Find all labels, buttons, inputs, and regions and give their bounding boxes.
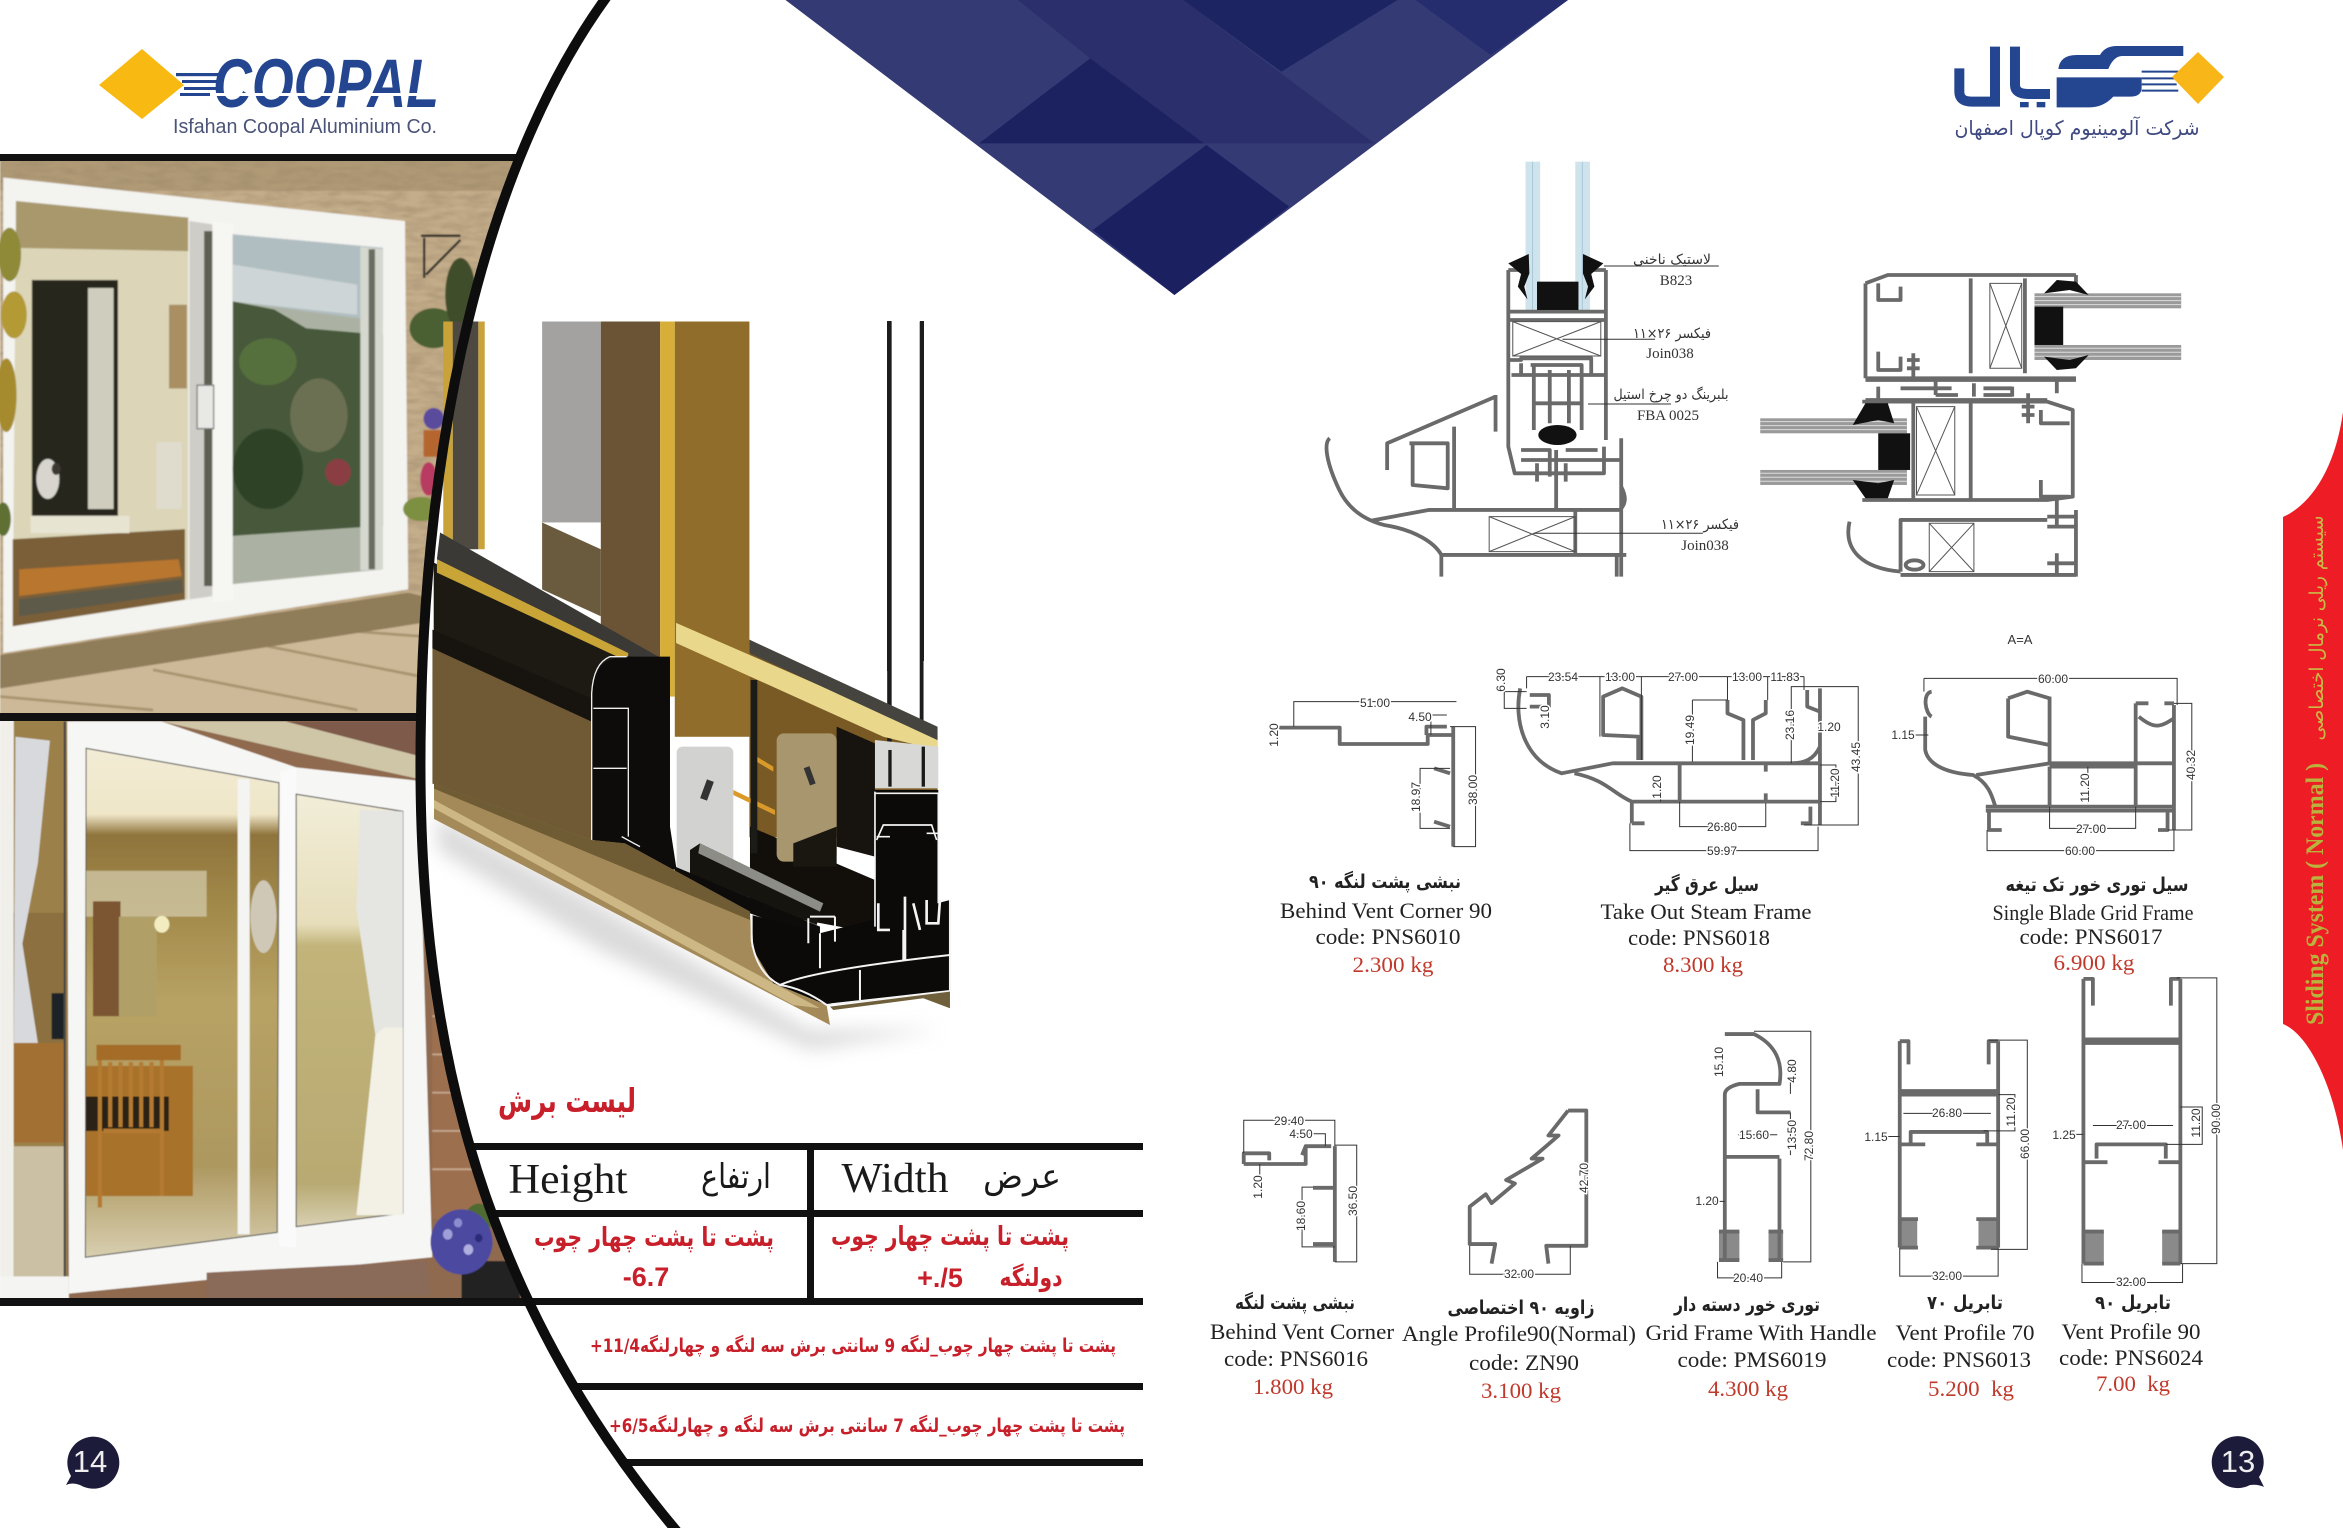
plants	[0, 228, 476, 536]
dimensions: 1.20	[1817, 720, 1841, 734]
company name: Isfahan Coopal Aluminium Co.	[173, 116, 437, 138]
dimensions: 59.97	[1707, 844, 1737, 858]
dimensions: 29.40	[1274, 1114, 1304, 1128]
dimensions	[1267, 696, 1480, 812]
dimensions: 27.00	[2076, 822, 2106, 836]
dimensions: 72.80	[1802, 1131, 1816, 1161]
header: height	[508, 1157, 771, 1203]
dimensions: 66.00	[2018, 1129, 2032, 1159]
dimensions: 18.97	[1409, 782, 1423, 812]
wordmark shapes	[1959, 46, 2183, 107]
dimensions: 51.00	[1360, 696, 1390, 710]
dimensions	[1504, 1163, 1591, 1281]
dimensions: 1.15	[1891, 728, 1915, 742]
callouts: FBA 0025	[1637, 408, 1699, 424]
cell: height formula: -6.7	[623, 1262, 669, 1292]
english tab title: Sliding System ( Normal )	[2302, 763, 2329, 1025]
persian name: تابریل ۷۰	[1927, 1292, 2003, 1314]
page number 13: 13	[2221, 1444, 2255, 1479]
dimensions: 1.20	[1695, 1194, 1719, 1208]
leader lines	[1534, 266, 1719, 533]
panel: cut list table	[470, 1081, 1143, 1466]
dimensions: 13.00	[1732, 670, 1762, 684]
panel: photographs clipped by curve	[0, 157, 541, 1303]
dimensions: 11.20	[2078, 773, 2092, 803]
dimensions: 26.80	[1932, 1106, 1962, 1120]
code: code: PNS6013	[1887, 1347, 2031, 1372]
dimensions: 60.00	[2065, 844, 2095, 858]
dimensions: 11.20	[2004, 1097, 2018, 1127]
dimensions: 13.00	[1605, 670, 1635, 684]
dimensions: 15.60	[1739, 1128, 1769, 1142]
profile drawing	[2075, 978, 2217, 1282]
weight: 8.300 kg	[1663, 952, 1743, 977]
dimensions: 20.40	[1733, 1271, 1763, 1285]
panel: Angle Profile 90	[1402, 1111, 1636, 1403]
dimensions: 32.00	[1504, 1267, 1534, 1281]
profile drawing	[1916, 678, 2192, 851]
persian name: نبشی پشت لنگه	[1235, 1291, 1355, 1314]
cell: width formula	[831, 1222, 1069, 1293]
dimensions: 23.16	[1783, 710, 1797, 740]
profile drawing	[1278, 702, 1476, 847]
profile drawing	[1244, 1120, 1357, 1262]
cell: height formula	[534, 1223, 774, 1292]
profile drawing	[1884, 1040, 2027, 1276]
photo frame bars	[0, 154, 528, 1306]
persian name: سیل عرق گیر	[1654, 873, 1759, 896]
profile drawing	[1504, 677, 1858, 851]
decorative navy triangle	[785, 0, 1568, 295]
dimensions: 11.20	[1828, 768, 1842, 798]
callouts	[1614, 252, 1739, 554]
english name: Single Blade Grid Frame	[1992, 900, 2194, 925]
dimensions: 60.00	[2038, 672, 2068, 686]
panel: Grid Frame With Handle	[1646, 1031, 1876, 1401]
panel: Vent Profile 90	[2052, 978, 2223, 1396]
company name persian: شرکت آلومینیوم کوپال اصفهان	[1954, 115, 2200, 141]
photo: patio sliding door with stone wall	[0, 157, 536, 720]
dimensions: 1.20	[1267, 723, 1281, 747]
dimensions: 1.20	[1650, 775, 1664, 799]
callouts: B823	[1660, 273, 1692, 289]
dimensions: 11.83	[1770, 670, 1800, 684]
english name: Grid Frame With Handle	[1646, 1320, 1876, 1345]
profile drawing	[1470, 1111, 1586, 1274]
panel: Take Out Steam Frame	[1494, 668, 1863, 977]
icon: yellow diamond	[99, 49, 184, 119]
dimensions: 1.25	[2052, 1128, 2076, 1142]
persian name: تابریل ۹۰	[2095, 1292, 2171, 1314]
cell: height formula: پشت تا پشت چهار چوب	[534, 1223, 774, 1253]
dimensions: 6.30	[1494, 668, 1508, 692]
panel: cutaway render of gold aluminium sliding profile	[432, 321, 950, 1050]
english name: Angle Profile90(Normal)	[1402, 1321, 1636, 1346]
profile drawing	[1714, 1031, 1811, 1278]
dimensions: 1.20	[1251, 1175, 1265, 1199]
lower profile section	[434, 657, 950, 1025]
callouts: Join038	[1646, 346, 1694, 362]
callouts: Join038	[1681, 538, 1729, 554]
page number 14	[66, 1437, 119, 1489]
code: code: PNS6016	[1224, 1346, 1368, 1371]
dimensions: 4.80	[1785, 1059, 1799, 1083]
section drawing	[1327, 162, 1719, 577]
code: code: PNS6010	[1316, 924, 1460, 949]
section label: A=A	[2008, 632, 2033, 647]
cell: width formula: پشت تا پشت چهار چوب	[831, 1222, 1069, 1252]
header: height: Height	[508, 1157, 628, 1203]
dimensions	[1864, 1097, 2032, 1283]
icon: yellow diamond	[2172, 52, 2224, 104]
weight: 4.300 kg	[1708, 1376, 1788, 1401]
cell: width formula: دولنگه	[1000, 1263, 1063, 1293]
english name: Vent Profile 70	[1896, 1320, 2034, 1345]
logo: COOPAL english	[99, 45, 442, 138]
dimensions: 38.00	[1466, 775, 1480, 805]
dimensions: 32.00	[1932, 1269, 1962, 1283]
dimensions: 15.10	[1712, 1047, 1726, 1077]
code: code: PNS6017	[2020, 924, 2162, 949]
panel: vertical section detail drawing	[1327, 162, 1739, 577]
code: code: PNS6018	[1628, 925, 1770, 950]
dimensions	[1251, 1114, 1360, 1231]
side tab: sliding system	[2283, 412, 2343, 1150]
persian tab title: سیستم ریلی نرمال اختصاصی	[2306, 516, 2328, 740]
panel: horizontal section A-A drawing	[1760, 275, 2181, 647]
panel: Single Blade Grid Frame	[1891, 672, 2198, 975]
dimensions: 1.15	[1864, 1130, 1888, 1144]
dimensions: 27.00	[2116, 1118, 2146, 1132]
dimensions: 13.50	[1785, 1120, 1799, 1150]
header: width: Width	[842, 1156, 948, 1202]
speed lines	[176, 73, 220, 96]
dimensions: 23.54	[1548, 670, 1578, 684]
header: height: ارتفاع	[701, 1157, 771, 1197]
persian name: زاویه ۹۰ اختصاصی	[1448, 1297, 1594, 1319]
code: code: ZN90	[1469, 1350, 1579, 1375]
dimensions: 90.00	[2209, 1104, 2223, 1134]
table lines	[470, 1143, 1143, 1466]
dimensions	[1891, 672, 2198, 858]
dimensions: 4.50	[1289, 1127, 1313, 1141]
photo: dining room sliding door	[0, 718, 541, 1303]
callouts: بلبرینگ دو چرخ استیل	[1614, 386, 1728, 403]
page number 14: 14	[73, 1444, 107, 1479]
weight: 2.300 kg	[1352, 952, 1434, 977]
dimensions: 40.32	[2184, 750, 2198, 780]
dimensions	[1695, 1047, 1816, 1285]
dimensions: 18.60	[1294, 1201, 1308, 1231]
shadow	[436, 815, 940, 1050]
panel: Behind Vent Corner 90	[1267, 696, 1492, 977]
wordmark: COOPAL	[213, 45, 439, 122]
callouts: فیکسر ۲۶×۱۱	[1661, 517, 1739, 533]
weight: 6.900 kg	[2054, 950, 2134, 975]
dimensions: 27.00	[1668, 670, 1698, 684]
cell: width formula: +./5	[917, 1263, 963, 1293]
english name: Behind Vent Corner	[1210, 1319, 1395, 1344]
persian name: توری خور دسته دار	[1673, 1294, 1820, 1316]
persian name: سیل توری خور تک تیغه	[2006, 874, 2188, 896]
dimensions: 42.70	[1577, 1163, 1591, 1193]
callouts: لاستیک ناخنی	[1633, 252, 1711, 268]
row: three and four sash 9cm: پشت تا پشت چهار چوب_لنگه 9 سانتی برش سه لنگه و چهارلنگه11/4+	[590, 1334, 1116, 1357]
logo: Coopal persian	[1954, 46, 2224, 141]
panel: Vent Profile 70	[1864, 1040, 2034, 1401]
english name: Behind Vent Corner 90	[1280, 898, 1492, 923]
dimensions: 32.00	[2116, 1275, 2146, 1289]
dimensions	[2052, 1104, 2223, 1289]
code: code: PMS6019	[1678, 1347, 1826, 1372]
dimensions: 3.10	[1538, 705, 1552, 729]
glass lines above	[887, 321, 924, 671]
callouts: فیکسر ۲۶×۱۱	[1633, 326, 1711, 342]
dimensions: 19.49	[1683, 715, 1697, 745]
dimensions	[1494, 668, 1863, 858]
row: three and four sash 7cm: پشت تا پشت چهار چوب_لنگه 7 سانتی برش سه لنگه و چهارلنگه6/5+	[609, 1414, 1125, 1437]
dimensions: 43.45	[1849, 742, 1863, 772]
page number 13	[2212, 1436, 2264, 1488]
table heading: لیست برش	[498, 1081, 636, 1121]
panel: Behind Vent Corner	[1210, 1114, 1395, 1399]
dimensions: 26.80	[1707, 820, 1737, 834]
upper frame and glass	[432, 322, 938, 854]
weight: 7.00 kg	[2096, 1371, 2170, 1396]
flowers	[431, 1204, 520, 1299]
weight: 5.200 kg	[1928, 1376, 2014, 1401]
header: width	[842, 1156, 1061, 1202]
dimensions: 4.50	[1408, 710, 1432, 724]
black arc divider	[420, 0, 680, 1528]
dimensions: 36.50	[1346, 1186, 1360, 1216]
weight: 1.800 kg	[1253, 1374, 1333, 1399]
code: code: PNS6024	[2059, 1345, 2203, 1370]
english name: Take Out Steam Frame	[1600, 899, 1812, 924]
persian name: نبشی پشت لنگه ۹۰	[1309, 870, 1461, 893]
weight: 3.100 kg	[1481, 1378, 1561, 1403]
dimensions: 11.20	[2189, 1108, 2203, 1138]
header: width: عرض	[983, 1157, 1061, 1197]
english name: Vent Profile 90	[2062, 1319, 2200, 1344]
